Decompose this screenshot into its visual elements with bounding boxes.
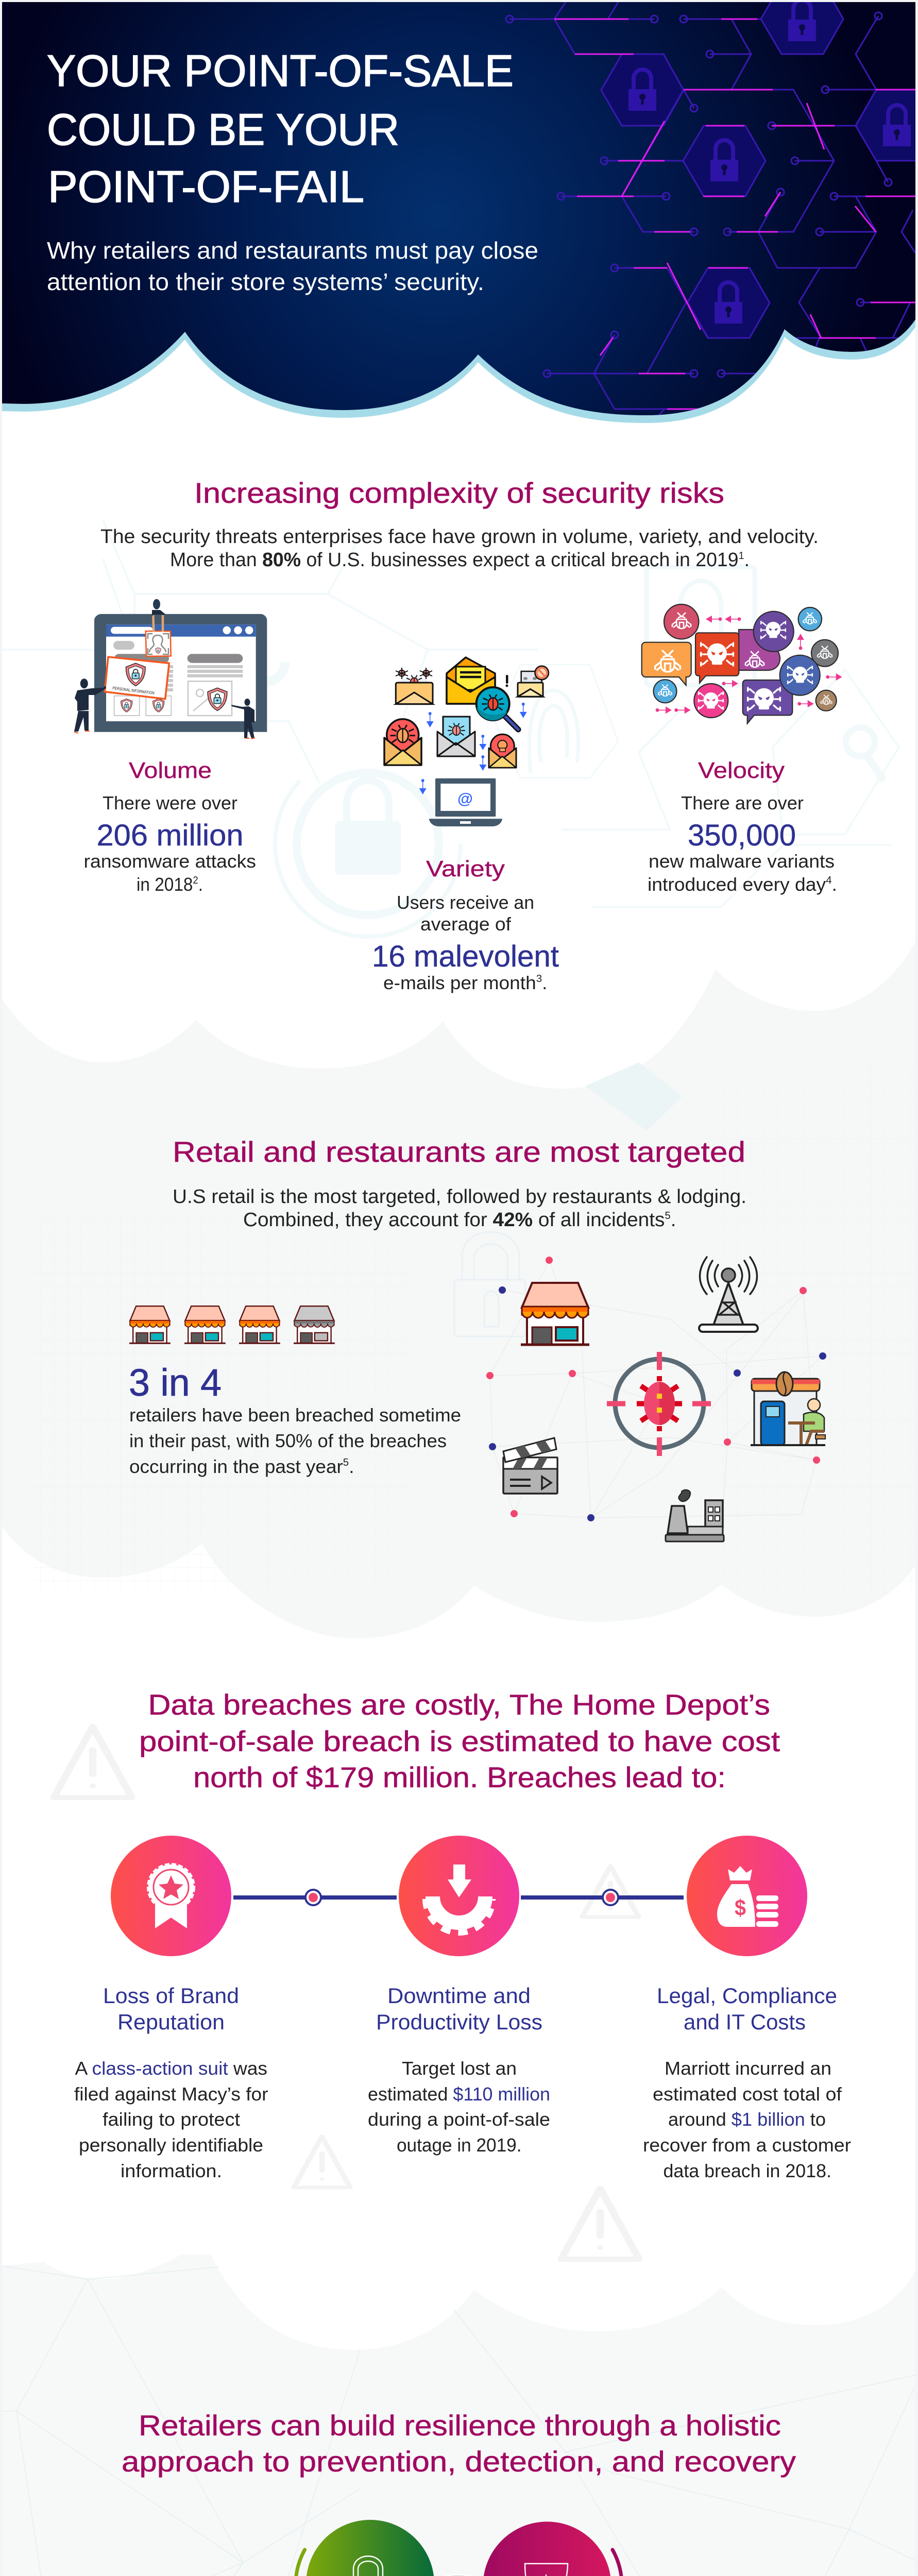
heading: approach to prevention, detection, and recovery bbox=[122, 2445, 796, 2478]
heading: north of $179 million. Breaches lead to: bbox=[193, 1761, 726, 1793]
column: legal, compliance and IT costs bbox=[643, 1984, 851, 2181]
column: loss of brand reputation: filed against Macy’s for bbox=[74, 2083, 268, 2105]
icon: factory bbox=[666, 1490, 724, 1541]
velocity stat: 4 bbox=[826, 875, 832, 886]
icon: cell tower bbox=[699, 1257, 758, 1332]
variety stat: Variety bbox=[426, 856, 505, 882]
title bbox=[47, 46, 514, 212]
watermark: security pattern bbox=[2, 520, 899, 937]
timeline connector bbox=[233, 1890, 684, 1905]
variety stat bbox=[372, 856, 559, 993]
heading: point-of-sale breach is estimated to have cost bbox=[139, 1725, 780, 1757]
subtitle: Why retailers and restaurants must pay close bbox=[47, 237, 538, 264]
stat: 3 in 4: 3 in 4 bbox=[129, 1361, 222, 1404]
icon: coffee shop bbox=[751, 1372, 825, 1445]
intro text bbox=[173, 1186, 746, 1231]
heading: Retail and restaurants are most targeted bbox=[173, 1136, 745, 1168]
icon row: 3 of 4 stores breached bbox=[129, 1306, 335, 1343]
variety stat: average of bbox=[420, 913, 512, 935]
column: loss of brand reputation: personally identifiable bbox=[79, 2134, 263, 2156]
intro text: 1 bbox=[739, 550, 744, 562]
column: downtime and productivity loss: Productivity Loss bbox=[376, 2010, 542, 2034]
velocity stat bbox=[648, 758, 837, 895]
column: legal, compliance and IT costs: data breach in 2018. bbox=[664, 2160, 831, 2181]
column: legal, compliance and IT costs: estimated cost total of bbox=[653, 2083, 842, 2105]
heading: Increasing complexity of security risks bbox=[194, 477, 724, 509]
panel: resilience bbox=[2, 2266, 915, 2576]
variety stat: 16 malevolent bbox=[372, 940, 559, 973]
panel: hero bbox=[2, 0, 918, 423]
intro text bbox=[100, 526, 819, 571]
column: downtime and productivity loss: Downtime and bbox=[387, 1984, 531, 2008]
column: loss of brand reputation bbox=[74, 1984, 268, 2181]
velocity stat: . bbox=[832, 874, 837, 895]
velocity stat: There are over bbox=[681, 792, 804, 814]
panel: retail and restaurants bbox=[33, 1061, 915, 1592]
volume stat: 206 million bbox=[97, 819, 243, 852]
network line pattern bbox=[2, 2266, 915, 2576]
network diagram bbox=[486, 1257, 826, 1541]
heading bbox=[122, 2409, 796, 2478]
volume stat: 2 bbox=[193, 875, 198, 886]
panel: increasing complexity of security risks bbox=[74, 477, 842, 993]
panel: data breach costs bbox=[54, 1688, 851, 2259]
volume stat: in 2018 bbox=[137, 874, 197, 895]
velocity stat: Velocity bbox=[698, 758, 785, 783]
venn diagram bbox=[296, 2520, 622, 2576]
circle: accelerated self-recovery bbox=[483, 2521, 622, 2576]
intro text: . bbox=[671, 1209, 676, 1231]
title: COULD BE YOUR bbox=[47, 105, 399, 155]
center ring with hands and lock bbox=[392, 2575, 524, 2576]
intro text: . bbox=[744, 549, 750, 571]
watermark: big lock bbox=[335, 781, 401, 875]
intro text: The security threats enterprises face have grown in volume, variety, and velocity. bbox=[100, 526, 819, 548]
volume stat bbox=[83, 758, 256, 895]
volume stat: There were over bbox=[103, 792, 237, 814]
heading bbox=[139, 1688, 780, 1793]
icon: variety malicious e-mails: @ bbox=[457, 790, 473, 807]
column: loss of brand reputation: information. bbox=[121, 2160, 222, 2181]
volume stat: Volume bbox=[129, 758, 212, 783]
variety stat: e-mails per month bbox=[383, 972, 532, 993]
volume stat: ransomware attacks bbox=[83, 851, 256, 872]
section background: resilience panel bbox=[2, 2255, 915, 2576]
circuit lock network bbox=[506, 0, 918, 417]
column: legal, compliance and IT costs: and IT Costs bbox=[684, 2010, 806, 2034]
column: legal, compliance and IT costs: recover from a customer bbox=[643, 2134, 851, 2156]
column: legal, compliance and IT costs: Legal, Compliance bbox=[657, 1984, 837, 2008]
column: downtime and productivity loss: during a point-of-sale bbox=[368, 2109, 550, 2130]
icon: brand reputation ribbon bbox=[111, 1836, 231, 1956]
stat: 3 in 4: . bbox=[349, 1456, 354, 1477]
title: POINT-OF-FAIL bbox=[48, 162, 364, 212]
column: legal, compliance and IT costs: Marriott incurred an bbox=[665, 2058, 831, 2079]
icon: virus target bbox=[607, 1352, 711, 1456]
column: downtime and productivity loss: estimated $110 million bbox=[368, 2083, 550, 2105]
variety stat: . bbox=[542, 972, 547, 993]
stat: 3 in 4: 5 bbox=[343, 1457, 349, 1468]
variety stat: 3 bbox=[536, 973, 542, 985]
icon: money bag: $ bbox=[735, 1895, 746, 1921]
heading: Retailers can build resilience through a holistic bbox=[139, 2409, 781, 2442]
icon: variety malicious e-mails bbox=[384, 657, 549, 826]
icon: velocity malware chat bubbles bbox=[642, 604, 842, 723]
icon: storefront bbox=[521, 1283, 589, 1345]
column: downtime and productivity loss bbox=[368, 1984, 550, 2156]
stat: 3 in 4: in their past, with 50% of the breaches bbox=[129, 1430, 447, 1451]
background grid and lock watermark bbox=[33, 1061, 915, 1592]
column: legal, compliance and IT costs: around $1 billion to bbox=[668, 2109, 826, 2130]
icon: money bag bbox=[687, 1836, 807, 1956]
column: loss of brand reputation: failing to protect bbox=[103, 2109, 240, 2130]
heading: Data breaches are costly, The Home Depot’s bbox=[148, 1688, 770, 1721]
stat: 3 in 4: occurring in the past year bbox=[129, 1456, 337, 1477]
column: loss of brand reputation: Loss of Brand bbox=[103, 1984, 239, 2008]
velocity stat: new malware variants bbox=[649, 851, 835, 872]
velocity stat: 350,000 bbox=[688, 819, 796, 852]
title: YOUR POINT-OF-SALE bbox=[47, 46, 514, 96]
velocity stat: introduced every day bbox=[648, 874, 820, 895]
watermark triangles bbox=[54, 1727, 639, 2259]
intro text: More than 80% of U.S. businesses expect a critical breach in 2019 bbox=[170, 549, 745, 571]
circle: comprehensive protection bbox=[296, 2520, 434, 2576]
stat: 3 in 4 bbox=[129, 1361, 461, 1477]
subtitle bbox=[47, 237, 538, 295]
intro text: Combined, they account for 42% of all incidents bbox=[243, 1209, 662, 1231]
column: loss of brand reputation: A class-action suit was bbox=[75, 2058, 267, 2079]
column: downtime and productivity loss: outage in 2019. bbox=[397, 2134, 521, 2156]
column: loss of brand reputation: Reputation bbox=[117, 2010, 225, 2034]
variety stat: Users receive an bbox=[397, 892, 534, 913]
icon: clapperboard bbox=[503, 1438, 557, 1494]
subtitle: attention to their store systems’ security. bbox=[47, 268, 484, 295]
icon: downtime gear and arrow bbox=[399, 1836, 519, 1956]
intro text: U.S retail is the most targeted, followed by restaurants & lodging. bbox=[173, 1186, 746, 1208]
column: downtime and productivity loss: Target lost an bbox=[402, 2058, 517, 2079]
stat: 3 in 4: retailers have been breached sometime bbox=[129, 1404, 461, 1426]
icon: volume browser with hackers: PERSONAL INFORMATION bbox=[112, 686, 155, 696]
intro text: 5 bbox=[665, 1210, 671, 1222]
volume stat: . bbox=[198, 874, 203, 895]
section background: retail panel bbox=[2, 941, 915, 1638]
icon: volume browser with hackers bbox=[74, 599, 267, 739]
